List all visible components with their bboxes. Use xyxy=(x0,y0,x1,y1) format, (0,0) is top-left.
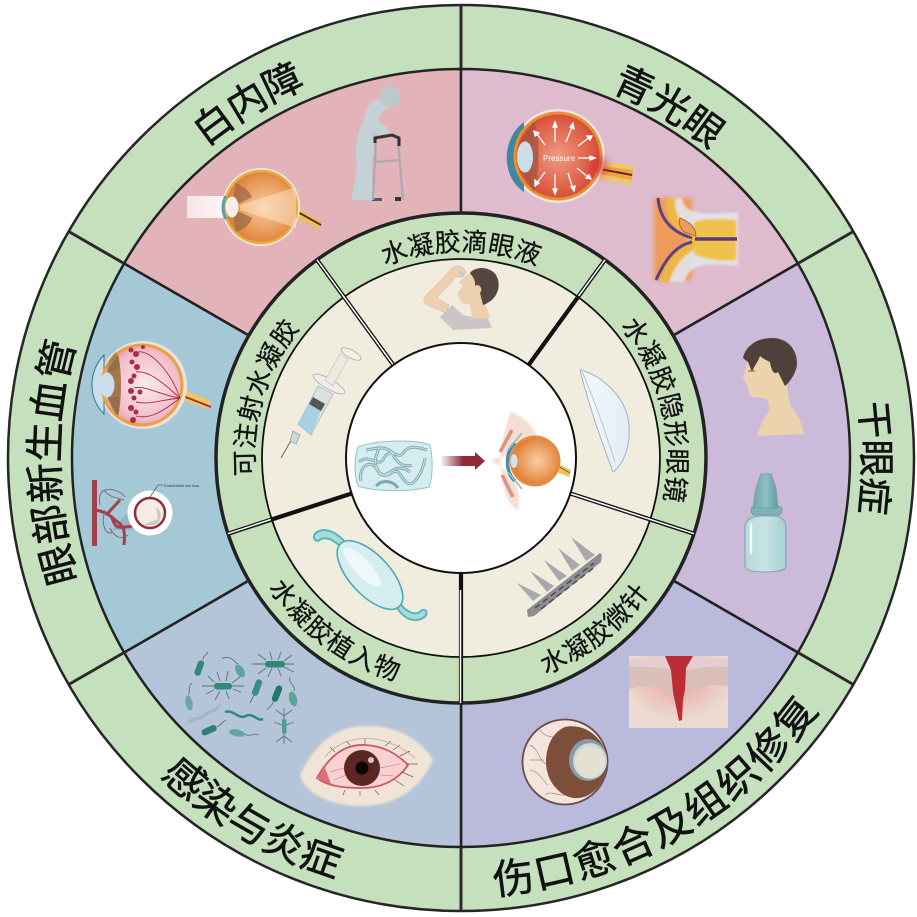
icon: damaged eyeball xyxy=(522,720,608,804)
sector panels ring xyxy=(72,69,850,847)
inner cream ring xyxy=(262,259,660,657)
icon: syringe xyxy=(281,345,363,458)
inner green ring xyxy=(216,213,706,703)
heading: dry eye: 干眼症 xyxy=(858,402,893,515)
icon: cataract eye with light beam xyxy=(187,168,322,246)
heading: infection and inflammation: 感染与炎症 xyxy=(160,756,345,880)
panel: glaucoma background xyxy=(461,69,798,336)
icon: eye drop bottle xyxy=(745,474,786,572)
icon: microneedle patch xyxy=(517,537,602,617)
icon: retinal vessels with endothelial cell loss: Endothelial cell loss xyxy=(164,483,199,488)
icon: person applying eye drops xyxy=(424,266,499,330)
heading: wound healing: 伤口愈合及组织修复 xyxy=(493,694,820,898)
center white circle xyxy=(346,343,576,573)
icon: glaucoma eye with pressure arrows: Pressure xyxy=(543,154,576,163)
icon: contact lens xyxy=(580,370,629,472)
panel: cataract background xyxy=(124,69,461,336)
icon: dry eye person profile xyxy=(743,338,804,436)
panel: wound healing background xyxy=(461,580,798,847)
icon: eye with lids xyxy=(491,412,571,510)
icon: neovascular eye xyxy=(92,341,211,429)
icon: hydrogel block xyxy=(355,441,432,491)
icon: glaucoma eye with pressure arrows xyxy=(507,109,633,203)
arrow: hydrogel to eye xyxy=(441,452,485,470)
label: hydrogel microneedle: 水凝胶微针 xyxy=(540,584,648,674)
label: injectable hydrogel: 可注射水凝胶 xyxy=(232,318,300,476)
icon: skin wound cross section xyxy=(629,656,728,728)
heading: ocular neovascularization: 眼部新生血管 xyxy=(25,338,78,586)
panel: neovascularization background xyxy=(72,264,249,652)
label: hydrogel eye drops: 水凝胶滴眼液 xyxy=(382,229,542,267)
panel: dry eye background xyxy=(673,264,850,652)
icon: hydrogel implant lens xyxy=(314,530,427,620)
icon: elderly person with walker xyxy=(352,86,403,201)
label: hydrogel contact lens: 水凝胶隐形眼镜 xyxy=(622,318,690,502)
panel: infection background xyxy=(124,580,461,847)
heading: glaucoma: 青光眼 xyxy=(616,64,726,150)
inner sector dividers xyxy=(228,260,694,703)
icon: optic nerve cross section xyxy=(654,198,738,282)
heading: cataract: 白内障 xyxy=(194,61,304,146)
icon: inflamed red eye xyxy=(300,726,433,806)
icon: bacteria cluster xyxy=(184,652,299,744)
label: hydrogel implant: 水凝胶植入物 xyxy=(270,580,401,682)
icon: retinal vessels with endothelial cell loss xyxy=(92,480,199,546)
